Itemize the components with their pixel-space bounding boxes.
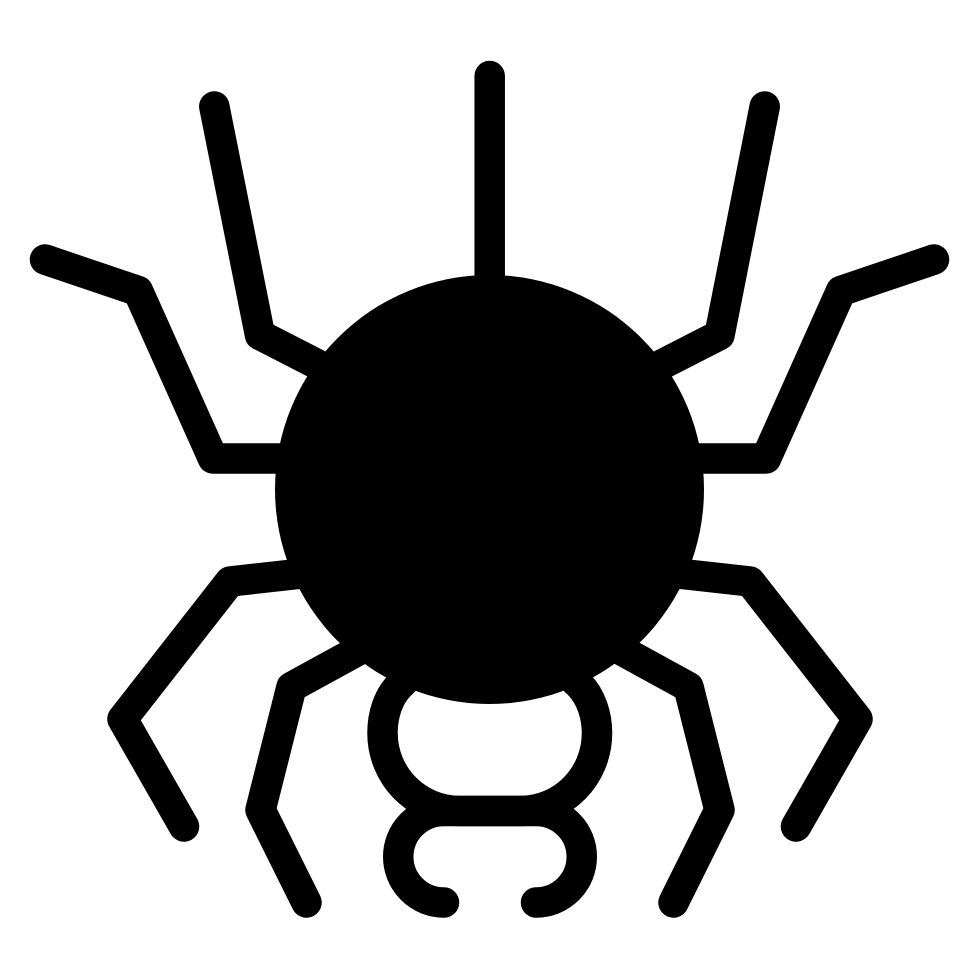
bottom right leg: [610, 644, 720, 902]
top centre leg: [474, 76, 505, 290]
tail coil: [398, 811, 582, 902]
upper right leg: [640, 106, 765, 376]
upper left leg: [214, 106, 340, 376]
middle left leg: [45, 260, 300, 458]
abdomen segment coil: [382, 665, 597, 811]
bottom left leg: [260, 644, 370, 902]
spider body: [275, 275, 704, 704]
lower left leg: [122, 572, 320, 826]
middle right leg: [679, 260, 934, 458]
lower right leg: [660, 572, 858, 826]
